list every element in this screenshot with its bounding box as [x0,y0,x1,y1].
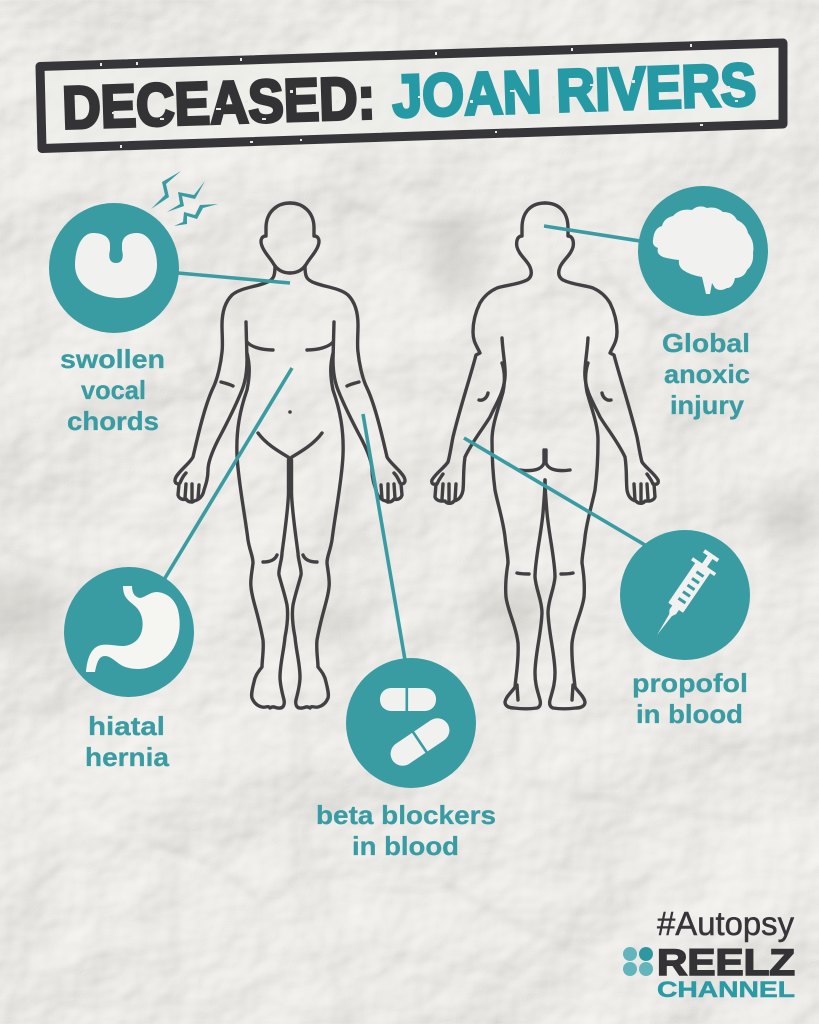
icon: brain [638,186,768,316]
label: global anoxic injury: anoxic [664,359,750,389]
callout: propofol in blood [620,530,750,729]
stamp border [40,43,783,148]
label: propofol in blood: in blood [636,699,743,729]
icon: vibration zigzags [151,171,218,226]
label: global anoxic injury: injury [670,390,745,420]
hashtag: #Autopsy [657,905,794,942]
label: propofol in blood [632,668,748,729]
label: hiatal hernia [85,711,170,772]
icon: vocal chords [49,203,179,333]
label: swollen vocal chords: chords [67,406,159,436]
callout: hiatal hernia [64,567,194,772]
back body outline [432,203,658,709]
label: swollen vocal chords: vocal [81,375,146,405]
icon: pills [346,658,476,788]
connector lines [162,226,645,660]
callout: beta blockers in blood [316,658,496,861]
label: swollen vocal chords [60,344,165,436]
navel [288,410,292,414]
label: beta blockers in blood: beta blockers [316,800,496,830]
brand block [623,905,795,1002]
heading: deceased: DECEASED: [61,64,376,141]
callout: global anoxic injury [638,186,768,420]
callout: swollen vocal chords [49,171,218,436]
heading: name: JOAN RIVERS [391,51,757,130]
label: global anoxic injury [662,328,750,420]
label: beta blockers in blood: in blood [352,831,459,861]
label: hiatal hernia: hernia [85,742,170,772]
label: propofol in blood: propofol [632,668,748,698]
label: global anoxic injury: Global [662,328,750,358]
logo wordmark: REELZ [657,942,795,983]
logo channel: CHANNEL [657,977,795,1002]
label: hiatal hernia: hiatal [88,711,165,741]
icon: syringe [620,530,750,660]
logo dots [623,947,653,976]
title stamp [40,43,783,148]
front body outline [175,203,405,708]
label: swollen vocal chords: swollen [60,344,165,374]
icon: stomach [64,567,194,697]
stamp distress specks [75,44,738,148]
label: beta blockers in blood [316,800,496,861]
